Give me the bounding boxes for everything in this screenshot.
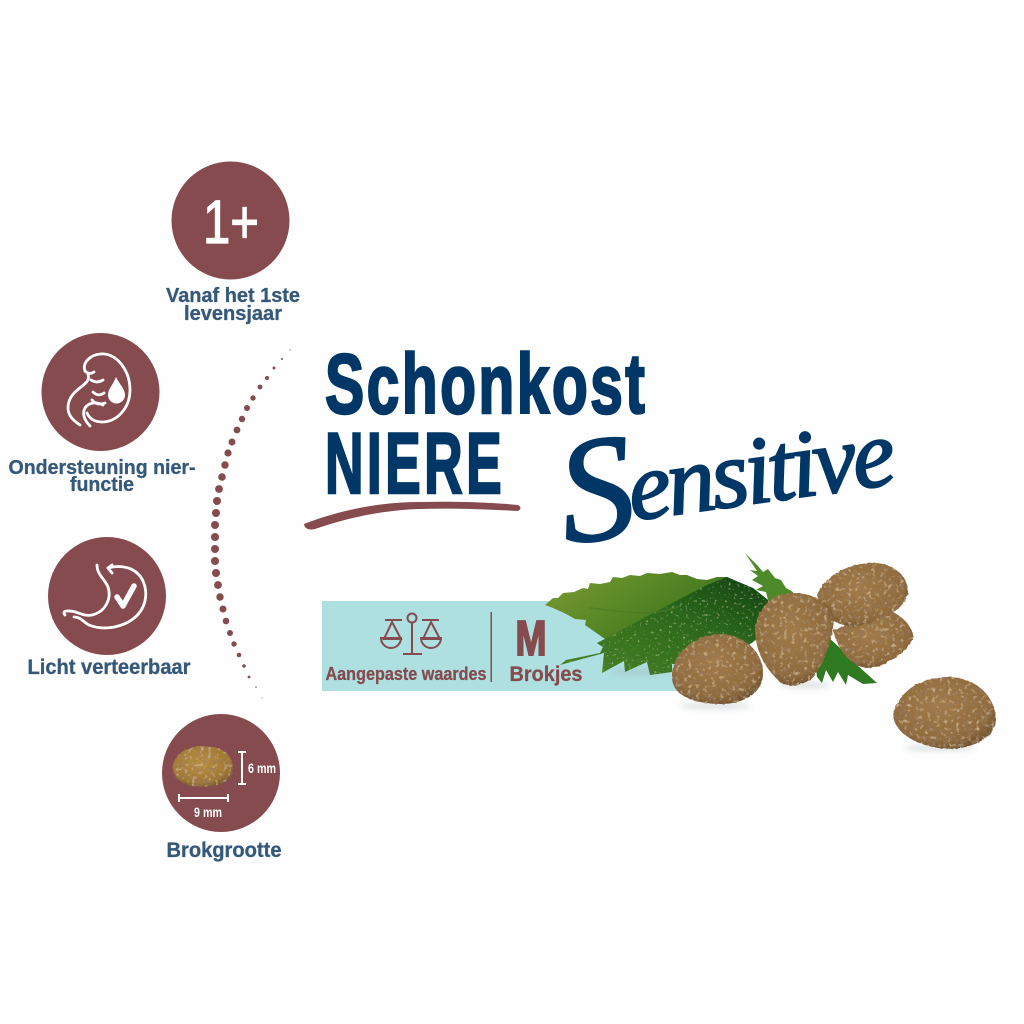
leaf upper half <box>545 572 775 650</box>
icon: kibble dimensions: 9 mm <box>194 804 222 820</box>
nettle leaf <box>545 572 775 675</box>
product photo: leaves and kibble <box>545 553 996 751</box>
feature: kibble size <box>162 714 282 862</box>
badge: 1+ <box>172 162 290 280</box>
label: kidney: Ondersteuning nier- <box>8 457 196 479</box>
script: Sensitive: S <box>547 402 645 577</box>
shadows <box>610 669 976 751</box>
label: Brokjes: Brokjes <box>510 663 582 686</box>
feature: age <box>166 162 300 325</box>
label: age: Vanaf het 1ste <box>166 285 300 307</box>
underline stroke <box>304 502 520 529</box>
size M: M <box>516 612 546 666</box>
kibble <box>173 746 233 787</box>
kibble front <box>672 634 763 704</box>
icon: scales <box>381 614 441 654</box>
label: adjusted values: Aangepaste waardes <box>326 664 486 684</box>
kibble far right <box>893 677 996 749</box>
badge: 1+: 1+ <box>203 188 259 256</box>
label: kibble size: Brokgrootte <box>166 839 282 862</box>
kibble centre <box>755 593 834 685</box>
label: age: levensjaar <box>184 303 282 325</box>
feature: kidney <box>8 333 196 496</box>
feature: digestion <box>28 537 190 679</box>
label: digestion: Licht verteerbaar <box>28 656 190 679</box>
kibble top right <box>818 563 908 627</box>
teal band <box>322 601 682 691</box>
lower nettle leaf <box>815 637 877 685</box>
nettle sprig <box>745 553 793 608</box>
title: NIERE: NIERE <box>325 416 502 512</box>
label: kidney: functie <box>70 474 134 496</box>
icon: kidney with drop <box>42 333 160 451</box>
icon: stomach with check <box>48 537 166 655</box>
leaf lower half <box>560 577 775 675</box>
title: Schonkost: Schonkost <box>325 338 645 432</box>
divider <box>490 612 492 682</box>
icon: kibble dimensions: 6 mm <box>248 760 276 776</box>
kibble back right <box>833 612 913 668</box>
icon: kibble dimensions <box>162 714 280 832</box>
dotted arc <box>211 349 291 698</box>
script: Sensitive: ensitive <box>620 398 900 541</box>
